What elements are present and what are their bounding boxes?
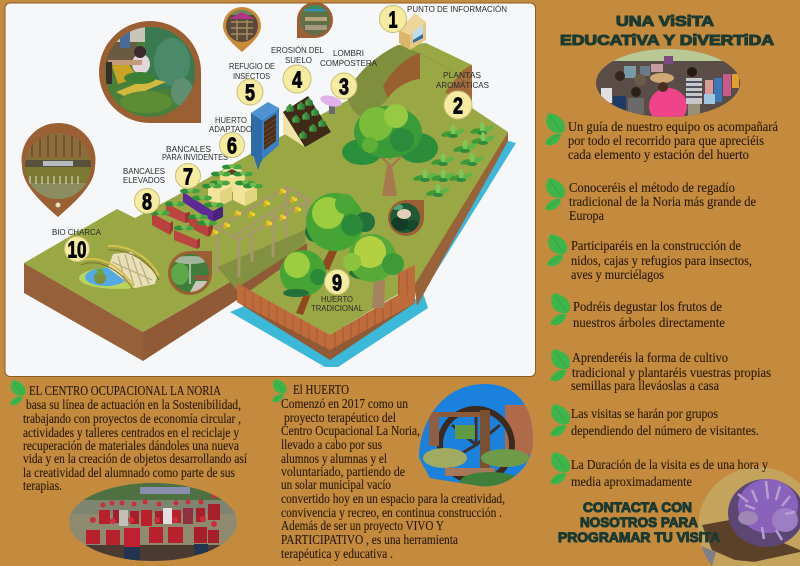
leaf bullet: el huerto (272, 379, 287, 402)
red raised beds (150, 201, 217, 249)
text: irrigation (569, 180, 756, 223)
station labels: COMPOSTERA (320, 58, 377, 68)
leaf bullet 7 (550, 452, 570, 484)
text: el centro ocupacional: recuperación de materiales dándoles una nueva (23, 438, 239, 453)
leaf bullet 6 (550, 404, 570, 436)
numbered markers: 7 (183, 164, 193, 190)
text: build nests (571, 238, 752, 282)
text: el huerto: convivencia y recreo, en continua construcción . (281, 505, 502, 520)
panel: garden map (5, 2, 536, 376)
text: el huerto: Además de ser un proyecto VIVO Y (281, 518, 444, 533)
numbered markers (64, 6, 472, 296)
numbered markers: 5 (245, 80, 255, 106)
station labels: PLANTAS (443, 70, 481, 80)
numbered markers: 9 (332, 270, 342, 296)
pergola with yellow flowers (211, 187, 310, 277)
text: el huerto (281, 382, 505, 561)
main garden terrain (135, 43, 508, 360)
text: build nests: nidos, cajas y refugios para insectos, (571, 253, 752, 268)
worm composter (319, 93, 343, 114)
text: taste fruits: nuestros árboles directamente (573, 315, 725, 330)
text: guide: cada elemento y estación del huerto (568, 147, 749, 162)
text: el huerto: El HUERTO (293, 382, 349, 397)
leaf bullet 5 (550, 349, 570, 381)
station labels: PARA INVIDENTES (162, 152, 228, 162)
text: irrigation: Europa (569, 208, 604, 223)
numbered markers: 6 (227, 132, 237, 158)
text: traditional cultivation: semillas para lleváoslas a casa (571, 378, 719, 393)
insect refuge (251, 102, 279, 170)
pin photo: bio pond (22, 123, 95, 217)
blind-accessible raised beds (202, 164, 263, 206)
text: el huerto: Centro Ocupacional La Noria, (281, 423, 420, 438)
leaf bullet 1 (545, 113, 565, 145)
text: duration: media aproximadamente (571, 474, 692, 489)
text: duration (571, 457, 768, 489)
station labels: ADAPTADO (209, 124, 252, 134)
text: irrigation: Conoceréis el método de regadío (569, 180, 735, 195)
text: traditional cultivation: Aprenderéis la forma de cultivo (572, 350, 728, 365)
photo: noria water wheel (419, 384, 533, 492)
station labels: HUERTO (321, 294, 353, 304)
text: el centro ocupacional: terapias. (23, 478, 62, 493)
station labels: INSECTOS (233, 71, 270, 81)
numbered markers: 2 (453, 92, 463, 118)
tree: back (305, 193, 375, 270)
text: traditional cultivation (571, 350, 771, 393)
water channel (230, 140, 516, 367)
text: el centro ocupacional (23, 383, 247, 493)
text: el huerto: Comenzó en 2017 como un (281, 396, 408, 411)
text: el centro ocupacional: EL CENTRO OCUPACIONAL LA NORIA (29, 383, 221, 398)
pin photo: soil erosion (297, 2, 333, 38)
fence: huerto tradicional (237, 265, 415, 352)
text: el huerto: PARTICIPATIVO , es una herramienta (281, 532, 458, 547)
numbered markers: 4 (292, 66, 302, 92)
leaf bullet 4 (550, 293, 570, 325)
numbered markers: 1 (388, 6, 398, 32)
text: el centro ocupacional: basa su línea de actuación en la Sostenibilidad, (26, 397, 241, 412)
heading: una visita educativa y divertida (560, 14, 775, 49)
pin photo: insect refuge (223, 7, 261, 52)
photo: lavender (695, 465, 800, 566)
call to action: PROGRAMAR TU ViSiTA (558, 529, 720, 545)
text: guide: Un guía de nuestro equipo os acompañará (568, 119, 778, 134)
text: el huerto: voluntariado, partiendo de (281, 464, 405, 479)
leaf bullet 3 (547, 234, 567, 266)
text: taste fruits: Podréis degustar los frutos de (573, 299, 722, 314)
text: guide (568, 119, 778, 162)
bio charca terrain (24, 209, 237, 361)
text: groups (571, 406, 759, 438)
text: build nests: aves y murciélagos (571, 267, 664, 282)
station labels: PUNTO DE INFORMACIÓN (407, 4, 507, 14)
pin photo: hands in plants (388, 200, 424, 236)
numbered markers: 8 (142, 188, 152, 214)
station labels: REFUGIO DE (229, 61, 275, 71)
text: el huerto: convertido hoy en un espacio para la creatividad, (281, 491, 505, 506)
text: el centro ocupacional: vida y en la creación de objetos desarrollando así (23, 451, 247, 466)
call to action (558, 499, 720, 545)
station labels: ELEVADOS (123, 175, 165, 185)
info point kiosk (399, 13, 426, 50)
text: el centro ocupacional: actividades y talleres centrados en el reciclaje y (23, 425, 239, 440)
text: build nests: Participaréis en la construcción de (571, 238, 741, 253)
call to action: CONTACTA CON (583, 499, 692, 515)
station labels: BIO CHARCA (52, 227, 101, 237)
leaf bullet: centro ocupacional (10, 380, 26, 405)
photo: visiting children (596, 49, 740, 117)
tree: right (343, 234, 404, 308)
numbered markers: 10 (68, 236, 86, 262)
pin photo: pergola crops (168, 251, 212, 295)
call to action: NOSOTROS PARA (580, 514, 698, 530)
numbered markers: 3 (339, 74, 349, 100)
bridge and pond (79, 246, 159, 289)
aromatic plants (413, 122, 495, 197)
station labels: AROMÁTICAS (436, 80, 489, 90)
text: el huerto: llevado a cabo por sus (281, 437, 382, 452)
text: traditional cultivation: tradicional y plantaréis vuestras propias (572, 365, 771, 380)
station labels: TRADICIONAL (311, 303, 363, 313)
pin photo: adapted garden (99, 21, 201, 123)
station labels: BANCALES (123, 166, 165, 176)
text: el huerto: proyecto terapéutico del (284, 410, 396, 425)
station labels: SUELO (285, 55, 312, 65)
station labels: EROSIÓN DEL (271, 45, 324, 55)
text: guide: por todo el recorrido para que apreciéis (568, 133, 764, 148)
text: groups: Las visitas se harán por grupos (571, 406, 718, 421)
heading: una visita educativa y divertida: EDUCATiVA Y DiVERTiDA (560, 33, 775, 49)
tree: central (342, 104, 438, 196)
text: el centro ocupacional: trabajando con proyectos de economía circular , (23, 411, 241, 426)
tree: left (280, 250, 326, 315)
text: el huerto: alumnos y alumnas y el (281, 451, 387, 466)
text: el centro ocupacional: la creatividad del alumnado como parte de sus (23, 465, 235, 480)
leaf bullet 2 (545, 178, 565, 210)
text: taste fruits (573, 299, 725, 330)
purple raised bed (180, 188, 224, 222)
text: el huerto: terapéutica y educativa . (281, 546, 393, 561)
station labels: BANCALES (166, 144, 211, 154)
photo: group in red vests (69, 483, 237, 561)
text: el huerto: un solar municipal vacío (281, 477, 391, 492)
station labels: LOMBRI (333, 48, 364, 58)
heading: una visita educativa y divertida: UNA ViSiTA (616, 14, 715, 30)
text: duration: La Duración de la visita es de una hora y (571, 457, 768, 472)
text: groups: dependiendo del número de visitantes. (571, 423, 759, 438)
text: irrigation: tradicional de la Noria más grande de (569, 194, 756, 209)
station labels (52, 4, 507, 313)
station labels: HUERTO (215, 115, 247, 125)
soil erosion slope (283, 96, 331, 147)
